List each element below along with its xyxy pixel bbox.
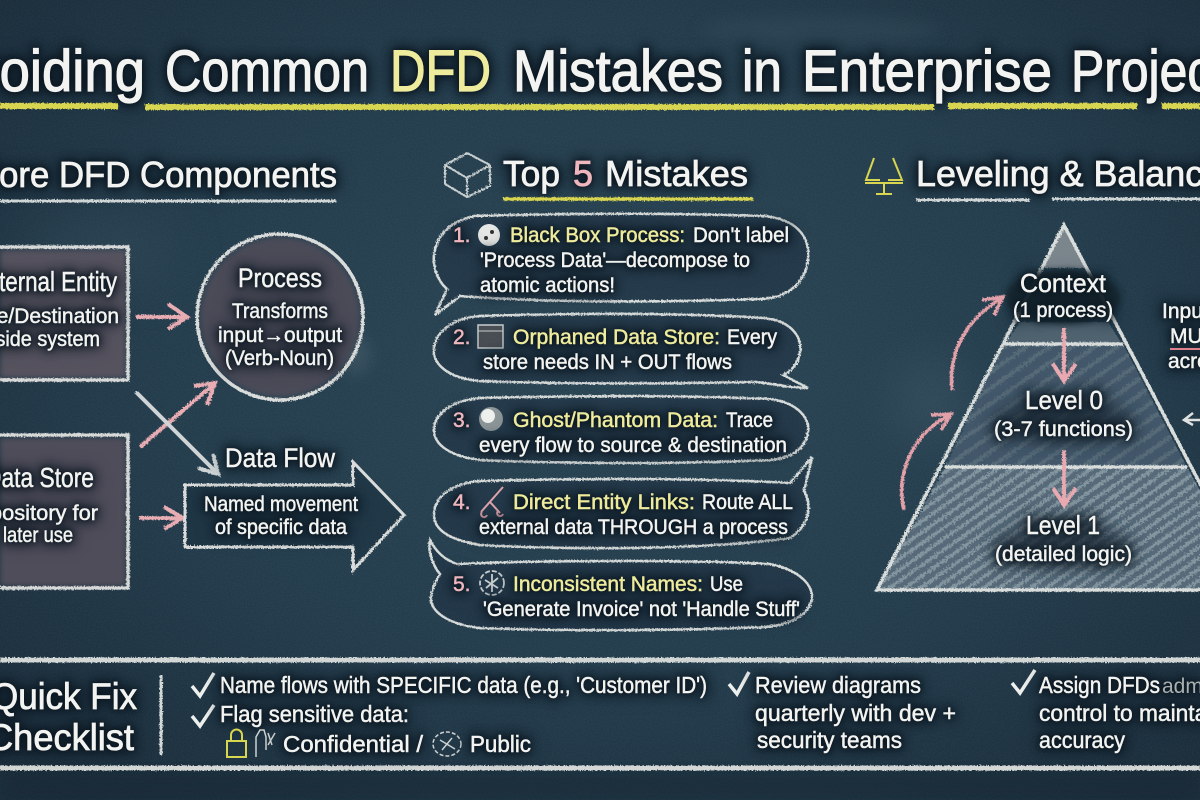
mistake 1: Don't label: [693, 224, 789, 247]
item: flag sensitive data: Flag sensitive data:: [220, 701, 409, 727]
mistake 2: Every: [727, 326, 777, 349]
item: review diagrams: quarterly with dev +: [755, 700, 956, 726]
title underline: [0, 106, 1200, 107]
mistake 3: [434, 396, 808, 463]
balancing rule note: [1162, 300, 1200, 373]
mistake 4: external data THROUGH a process: [479, 516, 788, 539]
data flow arrow: of specific data: [215, 516, 347, 539]
pyramid level labels: Level 1: [1026, 510, 1100, 540]
panel: core DFD components: [0, 154, 404, 588]
item: assign DFDs: Assign DFDs: [1039, 672, 1160, 698]
mistake 1: 'Process Data'—decompose to: [480, 249, 750, 272]
icon: ghost globe: [479, 407, 503, 431]
title: DFD: [390, 39, 491, 104]
icon: box: [445, 153, 490, 197]
item: name flows: Name flows with SPECIFIC data (e.g., 'Customer ID'): [220, 672, 707, 698]
mistake 2: Orphaned Data Store:: [513, 326, 720, 349]
heading: top 5 mistakes: [445, 153, 753, 199]
mistake 3: 3.: [453, 409, 471, 432]
pyramid level labels: [994, 268, 1133, 569]
icon: data store: [478, 325, 503, 348]
process circle: Process: [238, 263, 322, 293]
mistake 4: Direct Entity Links:: [513, 491, 695, 514]
mistake 4: [434, 457, 812, 548]
process circle: [197, 234, 363, 400]
icon: cloud scribble: [433, 732, 461, 756]
mistake 4: Route ALL: [702, 491, 793, 514]
heading: top 5 mistakes: Top: [503, 153, 560, 194]
mistake 4: 4.: [453, 491, 471, 514]
process circle: input→output: [218, 324, 342, 347]
icon: check: [1012, 670, 1035, 693]
mistake 1: 1.: [453, 224, 471, 247]
icon: lock: [227, 730, 246, 757]
data store box: [0, 435, 128, 588]
mistake 2: store needs IN + OUT flows: [483, 351, 732, 374]
mistake 5: 5.: [453, 573, 471, 596]
icon: tangled scribble: [480, 571, 504, 595]
mistake 3: Trace: [726, 409, 773, 432]
mistake 2: 2.: [453, 326, 471, 349]
mistake 2: [434, 314, 808, 388]
process circle: (Verb-Noun): [225, 347, 334, 370]
mistake 3: Ghost/Phantom Data:: [513, 409, 718, 432]
title: [0, 39, 1200, 107]
title: Common: [165, 39, 369, 104]
mistake 5: 'Generate Invoice' not 'Handle Stuff': [483, 598, 800, 621]
item: flag sensitive data: Confidential /: [283, 731, 424, 757]
pyramid level labels: Level 0: [1025, 385, 1103, 415]
item: assign DFDs: accuracy: [1039, 727, 1125, 753]
arrows: down through levels: [1053, 328, 1076, 505]
pyramid level labels: (detailed logic): [995, 543, 1132, 566]
pyramid level labels: Context: [1020, 268, 1107, 298]
data flow arrow: Named movement: [204, 493, 358, 516]
arrows: curved upward: [902, 297, 1003, 510]
mistake 5: Use: [710, 573, 743, 596]
title: in: [742, 39, 782, 104]
panel: quick fix checklist: [0, 660, 1200, 768]
mistake 5: Inconsistent Names:: [513, 573, 703, 596]
arrow: store to flow: [139, 507, 183, 529]
icon: check: [192, 705, 214, 726]
pyramid level labels: (3-7 functions): [994, 418, 1133, 441]
item: review diagrams: security teams: [757, 727, 902, 753]
icon: check: [729, 672, 749, 694]
icon: black box dot: [478, 224, 500, 246]
panel: leveling and balancing: [865, 153, 1200, 590]
data flow arrow: [185, 443, 404, 570]
checklist heading: [0, 676, 137, 758]
mistake 3: every flow to source & destination: [479, 434, 787, 457]
item: review diagrams: Review diagrams: [755, 672, 921, 698]
arrow: entity to data flow: [136, 392, 218, 474]
title: Mistakes: [513, 39, 723, 104]
mistake 5: [429, 540, 812, 630]
item: flag sensitive data: [192, 701, 531, 757]
arrow: entity to process: [136, 304, 187, 329]
icon: figure: [256, 730, 275, 757]
pyramid level labels: (1 process): [1013, 299, 1113, 322]
title: Enterprise: [802, 39, 1052, 104]
arrow: note to pyramid: [1184, 413, 1200, 425]
item: review diagrams: [729, 672, 956, 753]
heading: top 5 mistakes: Mistakes: [605, 153, 748, 194]
mistake 1: atomic actions!: [480, 274, 615, 297]
arrow: store to process: [140, 383, 215, 447]
data flow arrow: Data Flow: [225, 443, 335, 473]
heading: top 5 mistakes: 5: [573, 153, 593, 194]
panel: top 5 mistakes: [429, 153, 812, 630]
pyramid: [877, 225, 1200, 590]
external entity box: [0, 247, 128, 380]
data store box: later use: [3, 524, 73, 547]
icon: balance scale: [865, 158, 903, 194]
process circle: Transforms: [232, 300, 328, 323]
mistake 1: [434, 214, 808, 315]
mistake 1: Black Box Process:: [510, 224, 685, 247]
icon: check: [192, 673, 214, 696]
item: flag sensitive data: Public: [470, 731, 531, 757]
icon: broken link: [481, 487, 503, 517]
item: assign DFDs: [1012, 670, 1200, 753]
